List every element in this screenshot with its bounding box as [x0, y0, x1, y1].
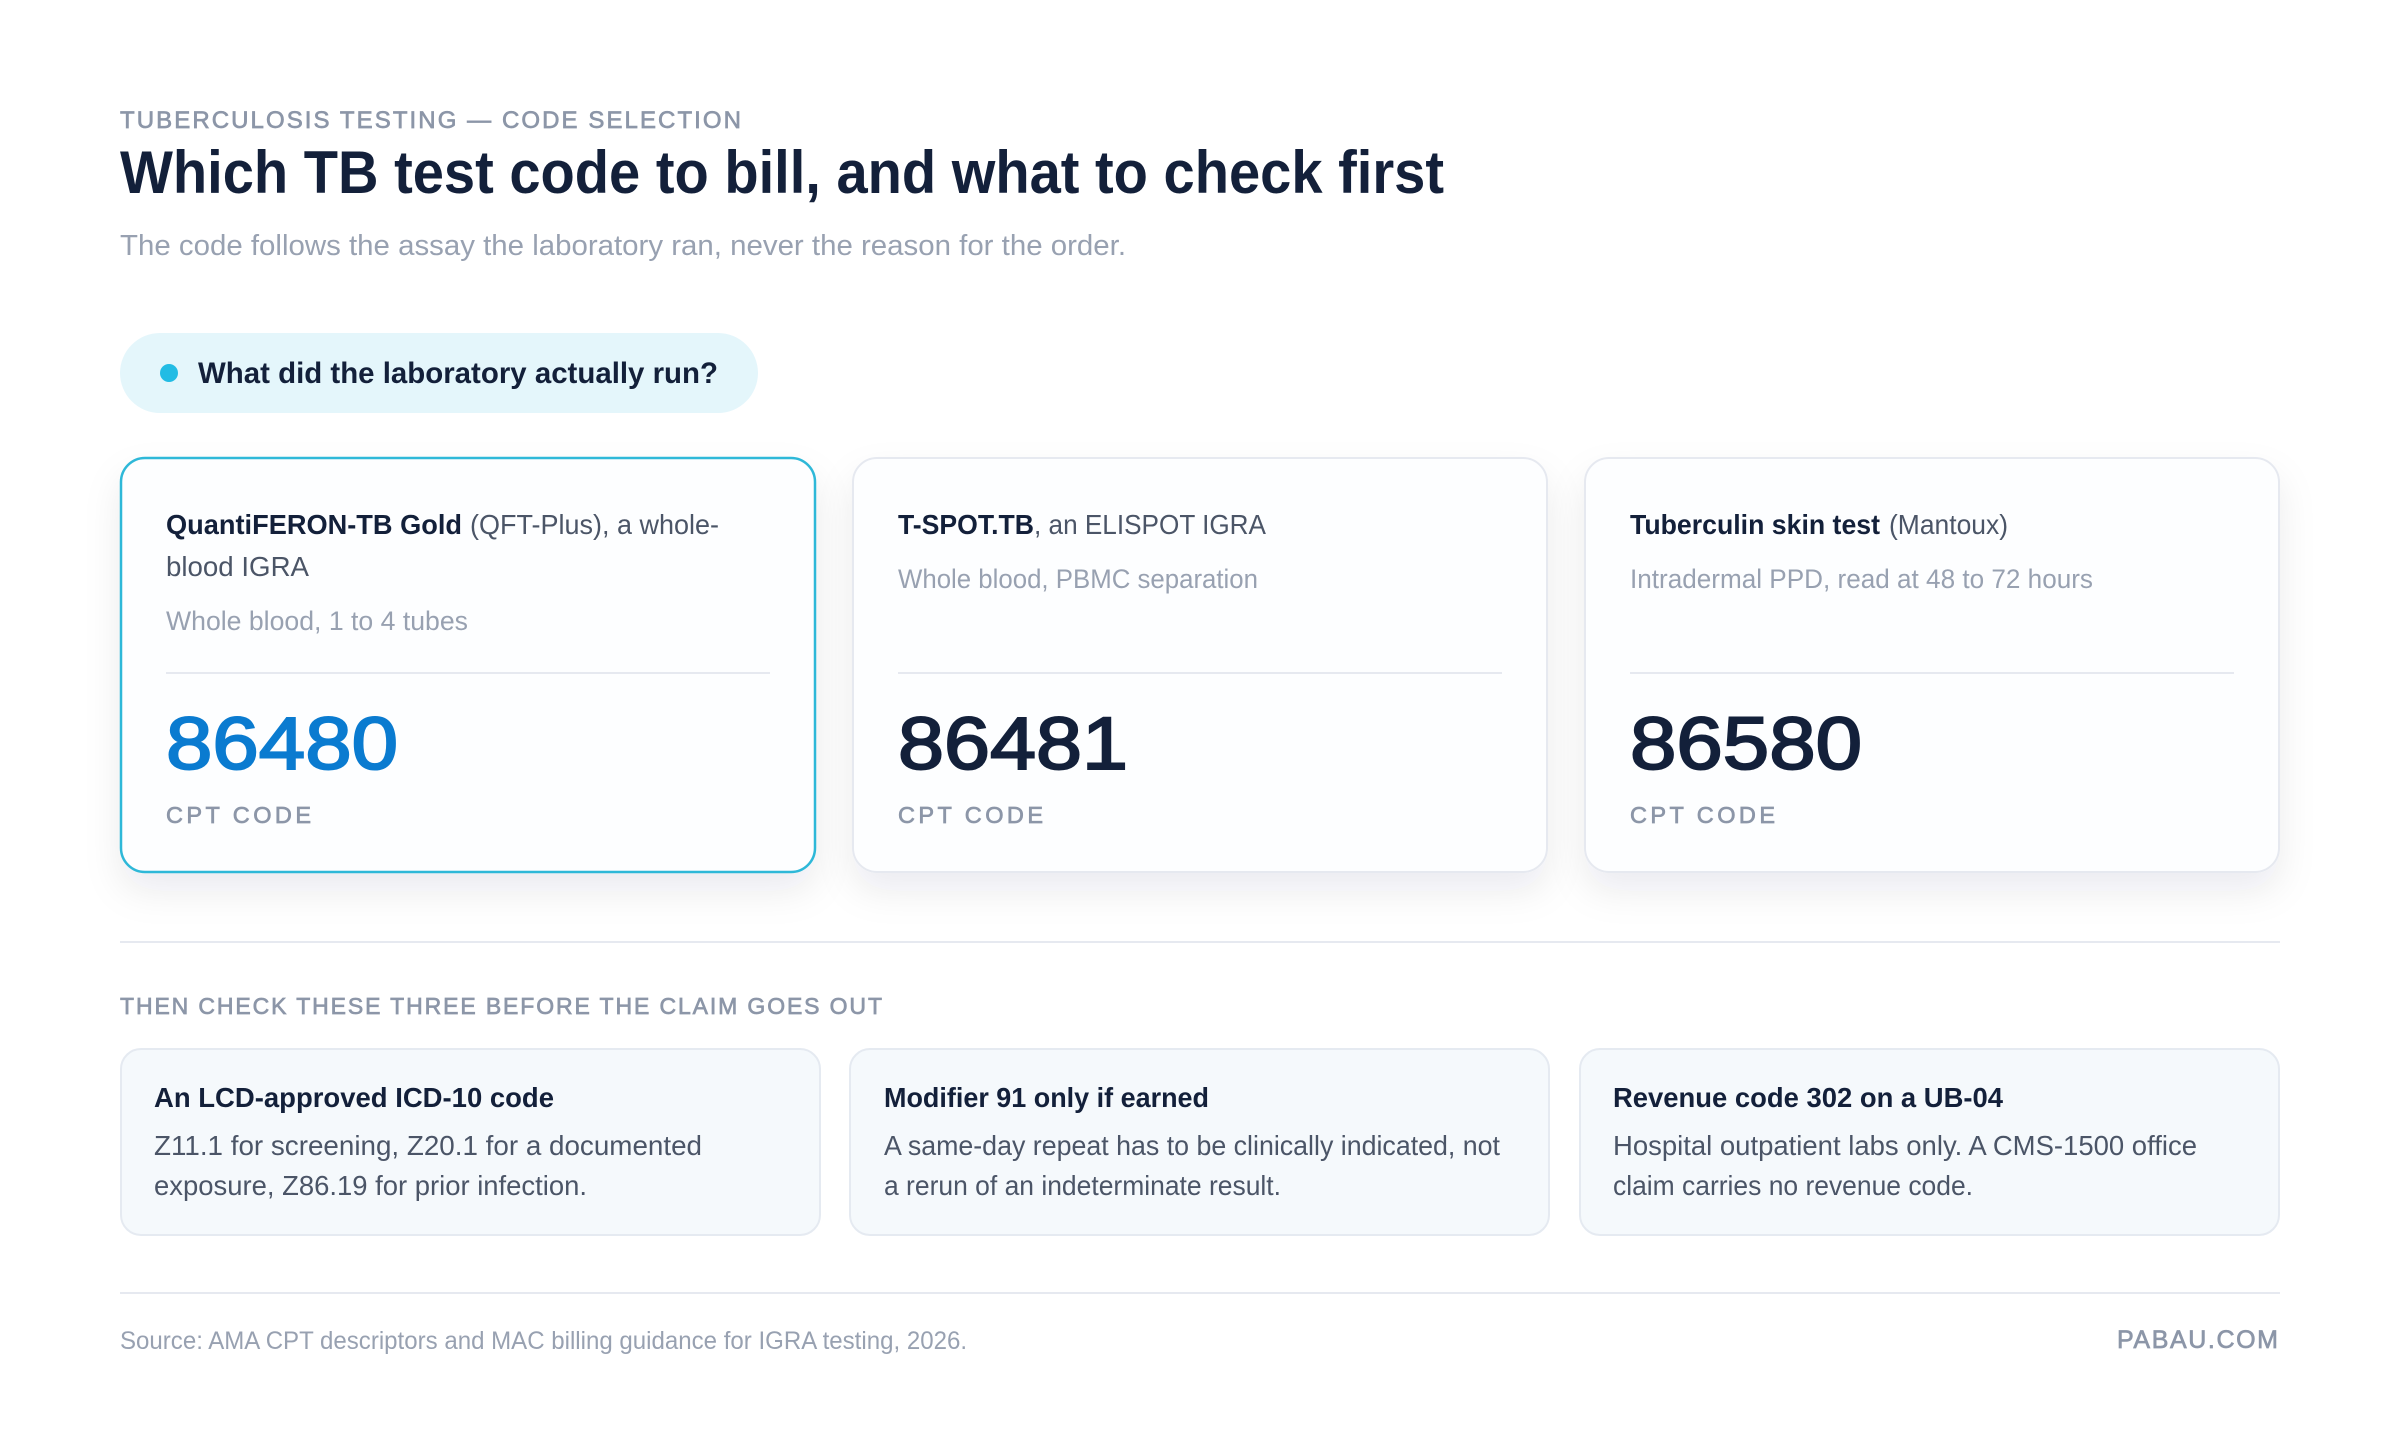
subtitle: The code follows the assay the laboratory ran, never the reason for the order.: [120, 230, 1126, 262]
source note: Source: AMA CPT descriptors and MAC billing guidance for IGRA testing, 2026.: [120, 1327, 967, 1355]
CPT code label: CPT CODE: [1630, 802, 1775, 828]
panel: QuantiFERON card: [121, 458, 815, 872]
check body: Z11.1 for screening, Z20.1 for a documented: [154, 1130, 702, 1161]
title: Which TB test code to bill, and what to check first: [120, 139, 1444, 206]
card description: , an ELISPOT IGRA: [1034, 509, 1266, 540]
check body: A same-day repeat has to be clinically indicated, not: [884, 1130, 1500, 1161]
specimen note: Whole blood, 1 to 4 tubes: [166, 606, 468, 636]
question pill: [120, 333, 758, 413]
eyebrow: TUBERCULOSIS TESTING — CODE SELECTION: [120, 107, 741, 134]
card description: blood IGRA: [166, 551, 309, 582]
CPT code number: 86480: [166, 702, 398, 785]
card description: T-SPOT.TB: [898, 509, 1034, 540]
panel: T-SPOT card: [853, 458, 1547, 872]
card description: [1630, 509, 2008, 540]
check body: [154, 1130, 702, 1201]
check body: claim carries no revenue code.: [1613, 1170, 1973, 1201]
check heading: Modifier 91 only if earned: [884, 1082, 1209, 1113]
card description: (Mantoux): [1889, 509, 2008, 540]
check body: [1613, 1130, 2197, 1201]
check heading: An LCD-approved ICD-10 code: [154, 1082, 554, 1113]
card description: [166, 509, 719, 582]
check body: Hospital outpatient labs only. A CMS-1500 office: [1613, 1130, 2197, 1161]
check body: exposure, Z86.19 for prior infection.: [154, 1170, 587, 1201]
specimen note: Intradermal PPD, read at 48 to 72 hours: [1630, 564, 2093, 594]
card description: [898, 509, 1266, 540]
brand: PABAU.COM: [2117, 1326, 2278, 1354]
check body: a rerun of an indeterminate result.: [884, 1170, 1281, 1201]
CPT code label: CPT CODE: [166, 802, 311, 828]
check body: [884, 1130, 1500, 1201]
CPT code number: 86580: [1630, 702, 1862, 785]
CPT code number: 86481: [898, 702, 1128, 785]
specimen note: Whole blood, PBMC separation: [898, 564, 1258, 594]
icon: cyan dot: [160, 364, 178, 382]
section heading: THEN CHECK THESE THREE BEFORE THE CLAIM GOES OUT: [120, 993, 882, 1019]
panel: revenue code check: [1580, 1049, 2279, 1235]
CPT code label: CPT CODE: [898, 802, 1043, 828]
card description: QuantiFERON-TB Gold: [166, 509, 462, 540]
check heading: Revenue code 302 on a UB-04: [1613, 1082, 2003, 1113]
panel: modifier 91 check: [850, 1049, 1549, 1235]
panel: ICD-10 check: [121, 1049, 820, 1235]
card description: (QFT-Plus), a whole-: [470, 509, 719, 540]
pill question text: What did the laboratory actually run?: [198, 357, 718, 390]
card description: Tuberculin skin test: [1630, 509, 1880, 540]
panel: tuberculin skin test card: [1585, 458, 2279, 872]
